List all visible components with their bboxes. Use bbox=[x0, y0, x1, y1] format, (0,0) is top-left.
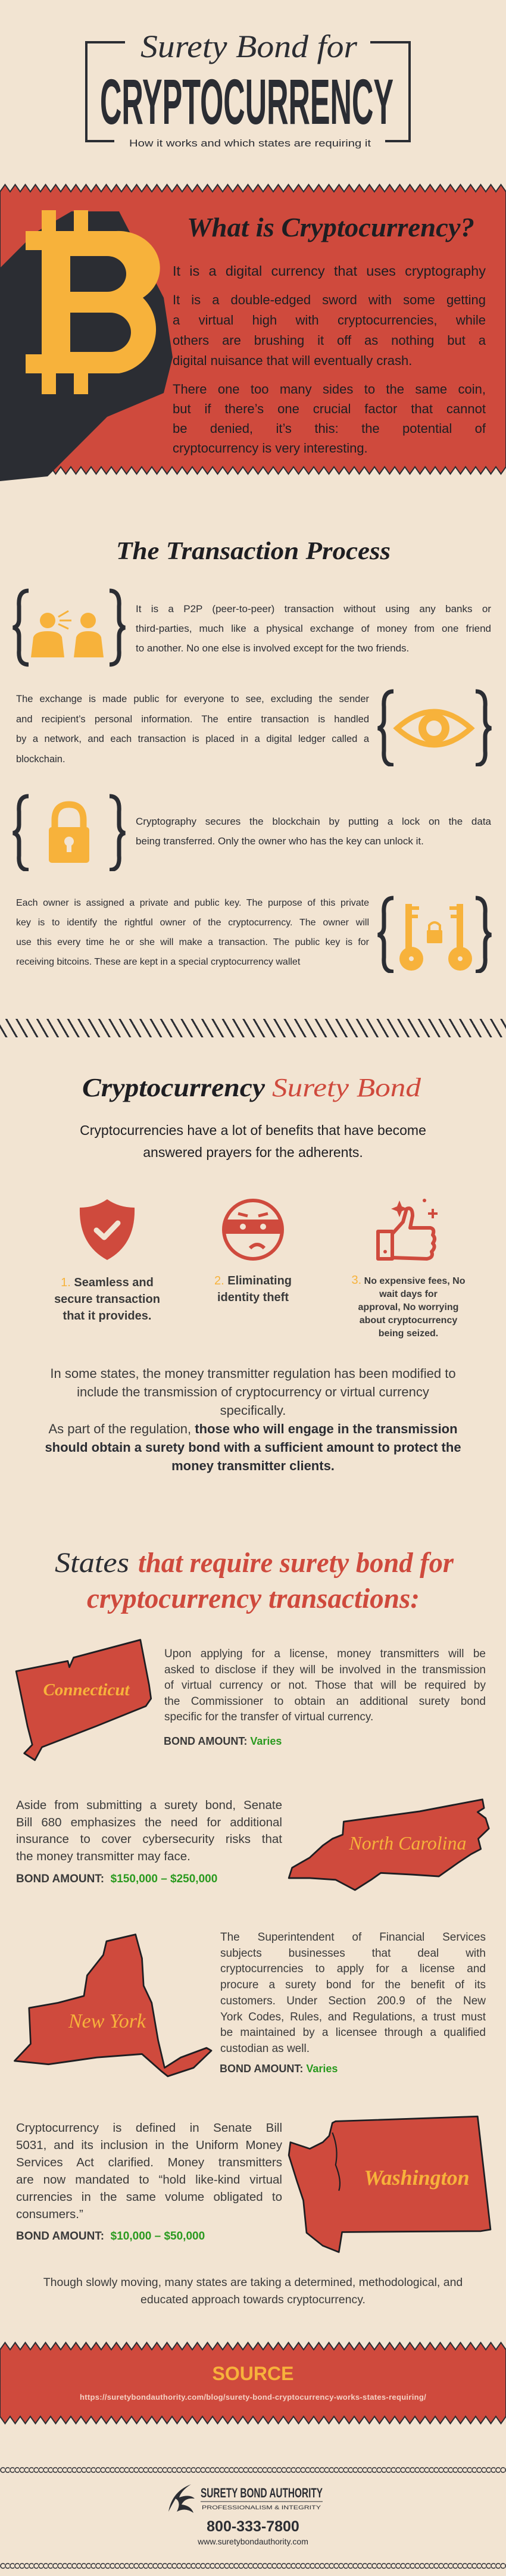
caption bbox=[54, 1276, 160, 1323]
icon: shield bbox=[80, 1199, 135, 1260]
heading: cryptocurrency surety bond bbox=[82, 1073, 421, 1102]
text: keys description: Each owner is assigned a private and public key. The purpose of this private bbox=[16, 898, 369, 908]
heading: cryptocurrency surety bond: Surety Bond bbox=[272, 1073, 421, 1102]
text: double-edged sword bbox=[173, 292, 486, 368]
text: p2p description: It is a P2P (peer-to-peer) transaction without using any banks or bbox=[136, 603, 491, 615]
text: cryptography lock bbox=[136, 816, 491, 847]
bond amount: Washington: BOND AMOUNT: $10,000 – $50,000 bbox=[16, 2230, 205, 2243]
text: Connecticut description: of virtual currency or not. Those that will be required by bbox=[164, 1679, 486, 1692]
icon: bitcoin long shadow bbox=[0, 211, 173, 481]
panel: source band bbox=[0, 2340, 506, 2427]
benefit: identity theft bbox=[214, 1199, 292, 1304]
heading: what is cryptocurrency: What is Cryptocurrency? bbox=[187, 212, 474, 242]
bond amount: Connecticut: BOND AMOUNT: Varies bbox=[164, 1735, 282, 1747]
text: potential: cryptocurrency is very interesting. bbox=[173, 441, 368, 456]
bond amount: North Carolina: BOND AMOUNT: $150,000 – $250,000 bbox=[16, 1873, 217, 1885]
label: New York: New York bbox=[68, 2010, 146, 2032]
text: regulation paragraph: include the transmission of cryptocurrency or virtual currency bbox=[77, 1384, 429, 1399]
text: Connecticut description: Upon applying for a license, money transmitters will be bbox=[164, 1648, 486, 1660]
red band bbox=[0, 185, 506, 474]
text: keys description: key is to identify the rightful owner of the cryptocurrency. The owner will bbox=[16, 918, 369, 928]
text: p2p description: to another. No one else is involved except for the two friends. bbox=[136, 643, 409, 654]
heading: states that require surety bond: cryptocurrency transactions: bbox=[87, 1583, 420, 1614]
item: lock bbox=[13, 794, 491, 871]
text: company name bbox=[201, 2481, 326, 2516]
caption: being seized. bbox=[379, 1328, 438, 1339]
text: double-edged sword: It is a double-edged sword with some getting bbox=[173, 292, 486, 307]
text: regulation paragraph: As part of the regulation, those who will engage in the transmission bbox=[48, 1421, 458, 1436]
text: ledger description: The exchange is made public for everyone to see, excluding the sender bbox=[16, 694, 369, 704]
text: North Carolina description bbox=[16, 1798, 282, 1863]
text: company name: PROFESSIONALISM & INTEGRITY bbox=[202, 2505, 321, 2510]
text: Washington description: currencies in the same volume obligated to bbox=[16, 2190, 282, 2204]
state shapes: CT, NC, NY bbox=[14, 1639, 490, 2077]
caption: that it provides. bbox=[63, 1309, 151, 1323]
icon: keys bbox=[377, 896, 492, 973]
text: Connecticut description: specific for the transfer of virtual currency. bbox=[164, 1711, 373, 1723]
icon: bitcoin B bbox=[26, 210, 160, 394]
label: Washington: Washington bbox=[364, 2166, 470, 2190]
text: New York description: custodian as well. bbox=[220, 2042, 310, 2055]
panel: what is cryptocurrency bbox=[0, 183, 506, 481]
text: phone: 800-333-7800 bbox=[207, 2518, 299, 2535]
text: potential: but if there’s one crucial factor that cannot bbox=[173, 401, 486, 416]
text: ledger description: blockchain. bbox=[16, 754, 65, 765]
text: Washington description: consumers.” bbox=[16, 2207, 83, 2221]
text: regulation paragraph: In some states, the money transmitter regulation has been modified to bbox=[50, 1366, 456, 1381]
text: website: www.suretybondauthority.com bbox=[198, 2537, 308, 2546]
icon: two people bbox=[13, 588, 126, 667]
text: ledger description bbox=[16, 694, 369, 765]
text: source url: https://suretybondauthority.com/blog/surety-bond-cryptocurrency-works-states-requiring/ bbox=[80, 2393, 426, 2402]
caption: secure transaction bbox=[54, 1293, 160, 1306]
heading: source: SOURCE bbox=[213, 2363, 293, 2384]
text: double-edged sword: a virtual high with cryptocurrencies, while bbox=[173, 313, 486, 328]
caption: 3. No expensive fees, No bbox=[351, 1274, 465, 1287]
text: benefits intro: answered prayers for the adherents. bbox=[143, 1144, 363, 1160]
bracket frame bbox=[86, 42, 410, 141]
heading: states that require surety bond bbox=[55, 1547, 454, 1614]
subtitle: How it works and which states are requiring it bbox=[129, 138, 371, 149]
label: Connecticut: Connecticut bbox=[43, 1680, 130, 1699]
text: p2p description bbox=[136, 603, 491, 654]
map: north carolina bbox=[289, 1800, 489, 1890]
caption: about cryptocurrency bbox=[360, 1315, 457, 1326]
bond amount: New York: BOND AMOUNT: Varies bbox=[220, 2063, 338, 2075]
text: ledger description: by a network, and each transaction is placed in a digital ledger called a bbox=[16, 734, 369, 744]
text: keys description: receiving bitcoins. These are kept in a special cryptocurrency wallet bbox=[16, 957, 300, 967]
text: benefits intro: Cryptocurrencies have a lot of benefits that have become bbox=[80, 1122, 426, 1138]
text: potential: be denied, it’s this: the potential of bbox=[173, 421, 486, 436]
heading: cryptocurrency surety bond: Cryptocurrency bbox=[82, 1073, 266, 1102]
icon: thumbs up bbox=[376, 1199, 438, 1261]
icon: padlock bbox=[13, 794, 126, 871]
text: North Carolina description: Aside from submitting a surety bond, Senate bbox=[16, 1798, 282, 1812]
text: keys description: use this every time he or she will make a transaction. The public key is for bbox=[16, 937, 369, 947]
map: washington bbox=[0, 2084, 506, 2263]
text: benefits intro bbox=[80, 1122, 426, 1160]
map: new york bbox=[14, 1935, 211, 2076]
text: New York description: procure a surety bond for the benefit of its bbox=[220, 1979, 486, 1991]
text: what is definition: It is a digital currency that uses cryptography bbox=[173, 263, 486, 279]
caption: identity theft bbox=[217, 1291, 289, 1304]
item: p2p bbox=[13, 588, 491, 667]
text: closing statement: Though slowly moving, many states are taking a determined, methodological, and bbox=[43, 2276, 463, 2289]
text: Washington description: are now mandated to “hold like-kind virtual bbox=[16, 2173, 282, 2187]
text: Washington description bbox=[16, 2121, 282, 2221]
map: connecticut bbox=[16, 1640, 151, 1760]
caption: 2. Eliminating bbox=[214, 1274, 292, 1287]
text: potential: There one too many sides to the same coin, bbox=[173, 382, 486, 397]
text: double-edged sword: digital nuisance that will eventually crash. bbox=[173, 353, 412, 368]
text: Washington description: Services Act clarified. Money transmitters bbox=[16, 2156, 282, 2169]
caption: 1. Seamless and bbox=[61, 1276, 154, 1289]
divider: chain bottom bbox=[0, 2562, 506, 2569]
text: New York description: York Codes, Rules, and Regulations, a trust must bbox=[220, 2011, 486, 2023]
text: North Carolina description: the money transmitter may face. bbox=[16, 1850, 190, 1863]
benefit: seamless bbox=[54, 1199, 160, 1323]
divider: hatch stripe bbox=[0, 1019, 506, 1037]
icon: eye bbox=[377, 690, 492, 766]
text: closing statement bbox=[12, 2274, 494, 2309]
caption: approval, No worrying bbox=[358, 1302, 458, 1312]
item: keys bbox=[16, 896, 492, 973]
heading: states that require surety bond: that require surety bond for bbox=[138, 1547, 454, 1579]
text: Connecticut description: asked to disclose if they will be involved in the transmission bbox=[164, 1664, 486, 1676]
heading: the transaction process: The Transaction Process bbox=[116, 538, 391, 565]
text: keys description bbox=[16, 898, 369, 967]
text: New York description: The Superintendent of Financial Services bbox=[220, 1931, 486, 1944]
text: New York description: subjects businesses that deal with bbox=[220, 1947, 486, 1960]
text: Washington description: Cryptocurrency is defined in Senate Bill bbox=[16, 2121, 282, 2135]
text: p2p description: third-parties, much like a physical exchange of money from one friend bbox=[136, 623, 491, 634]
divider: chain top bbox=[0, 2466, 506, 2474]
caption: wait days for bbox=[379, 1289, 438, 1299]
title script line: Surety Bond for bbox=[140, 29, 358, 64]
text: regulation paragraph: should obtain a surety bond with a sufficient amount to protect the bbox=[45, 1440, 461, 1455]
label: North Carolina: North Carolina bbox=[349, 1832, 467, 1854]
text: regulation paragraph: specifically. bbox=[220, 1403, 286, 1418]
text: cryptography lock: being transferred. Only the owner who has the key can unlock it. bbox=[136, 835, 424, 847]
text: double-edged sword: others are brushing it off as nothing but a bbox=[173, 333, 486, 348]
text: Connecticut description bbox=[164, 1648, 486, 1723]
text: closing statement: educated approach towards cryptocurrency. bbox=[140, 2293, 366, 2306]
text: New York description: customers. Under Section 200.9 of the New bbox=[220, 1995, 486, 2007]
text: New York description bbox=[220, 1931, 486, 2055]
text: North Carolina description: insurance to cover cybersecurity risks that bbox=[16, 1832, 282, 1846]
caption bbox=[214, 1274, 292, 1304]
item: public ledger bbox=[16, 690, 492, 766]
header: title block bbox=[85, 29, 411, 149]
text: New York description: cryptocurrencies to apply for a license and bbox=[220, 1963, 486, 1975]
text: regulation paragraph bbox=[45, 1366, 461, 1473]
caption bbox=[351, 1274, 465, 1339]
text: North Carolina description: Bill 680 emphasizes the need for additional bbox=[16, 1816, 282, 1829]
icon: masked face bbox=[222, 1199, 284, 1261]
text: potential bbox=[173, 382, 486, 456]
text: ledger description: and recipient’s personal information. The entire transaction is handled bbox=[16, 713, 369, 724]
text: regulation paragraph: money transmitter clients. bbox=[171, 1458, 335, 1473]
icon: logo swirl bbox=[164, 2481, 199, 2516]
text: cryptography lock: Cryptography secures the blockchain by putting a lock on the data bbox=[136, 816, 491, 827]
text: New York description: be maintained by a licensee through a qualified bbox=[220, 2026, 486, 2039]
text: Connecticut description: the Commissioner to obtain an additional surety bond bbox=[164, 1695, 486, 1708]
footer: logo bbox=[164, 2481, 327, 2516]
heading: states that require surety bond: States bbox=[55, 1547, 129, 1579]
text: Washington description: 5031, and its inclusion in the Uniform Money bbox=[16, 2138, 282, 2152]
benefit: no fees bbox=[351, 1199, 465, 1339]
